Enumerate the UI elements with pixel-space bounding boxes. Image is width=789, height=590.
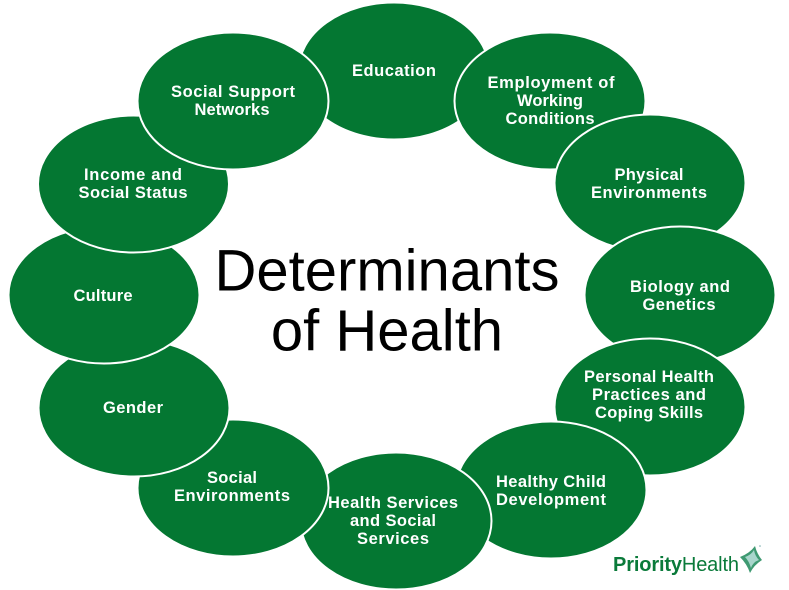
oval: Personal Health Practices and Coping Skills: Personal Health <box>584 368 714 386</box>
oval: Personal Health Practices and Coping Skills <box>554 338 746 476</box>
oval: Personal Health Practices and Coping Skills: Coping Skills <box>595 404 703 422</box>
oval: Education <box>298 2 490 140</box>
oval: Biology and Genetics: Genetics <box>642 296 716 314</box>
oval: Physical Environments: Environments <box>591 184 707 202</box>
oval: Employment of Working Conditions: Working <box>517 92 583 110</box>
oval: Health Services and Social Services <box>300 452 492 590</box>
oval: Social Environments: Environments <box>174 487 290 505</box>
oval: Culture: Culture <box>74 287 132 305</box>
oval: Biology and Genetics: Biology and <box>630 278 730 296</box>
oval: Gender <box>38 340 230 476</box>
oval: Income and Social Status: Social Status <box>78 184 188 202</box>
oval: Biology and Genetics <box>584 226 776 364</box>
logo: Priority Health <box>613 545 762 576</box>
logo wordmark: PriorityHealth <box>613 554 739 576</box>
oval: Income and Social Status <box>38 116 229 252</box>
title: of Health <box>271 298 503 364</box>
oval: Physical Environments: Physical <box>614 166 684 184</box>
oval: Social Environments: Social <box>207 469 257 487</box>
oval: Culture <box>8 226 200 364</box>
title: Determinants <box>215 238 559 304</box>
oval: Physical Environments <box>554 114 746 252</box>
oval: Employment of Working Conditions <box>454 32 646 170</box>
oval: Health Services and Social Services: Services <box>357 530 429 548</box>
oval: Health Services and Social Services: and Social <box>350 512 436 530</box>
oval: Employment of Working Conditions: Employment of <box>488 74 615 92</box>
oval: Gender: Gender <box>103 399 164 417</box>
oval: Healthy Child Development: Healthy Child <box>496 473 606 491</box>
oval: Education: Education <box>352 62 436 80</box>
oval: Social Support Networks <box>138 32 328 170</box>
title <box>215 238 559 364</box>
oval: Healthy Child Development: Development <box>496 491 606 509</box>
oval: Social Support Networks: Networks <box>194 101 270 119</box>
oval: Healthy Child Development <box>456 422 646 558</box>
oval: Income and Social Status: Income and <box>84 166 182 184</box>
oval: Social Environments <box>138 420 328 556</box>
oval: Personal Health Practices and Coping Skills: Practices and <box>592 386 706 404</box>
oval: Employment of Working Conditions: Conditions <box>506 110 594 128</box>
oval: Health Services and Social Services: Health Services <box>328 494 458 512</box>
oval: Social Support Networks: Social Support <box>171 83 296 101</box>
icon: logo diamond <box>740 545 762 573</box>
